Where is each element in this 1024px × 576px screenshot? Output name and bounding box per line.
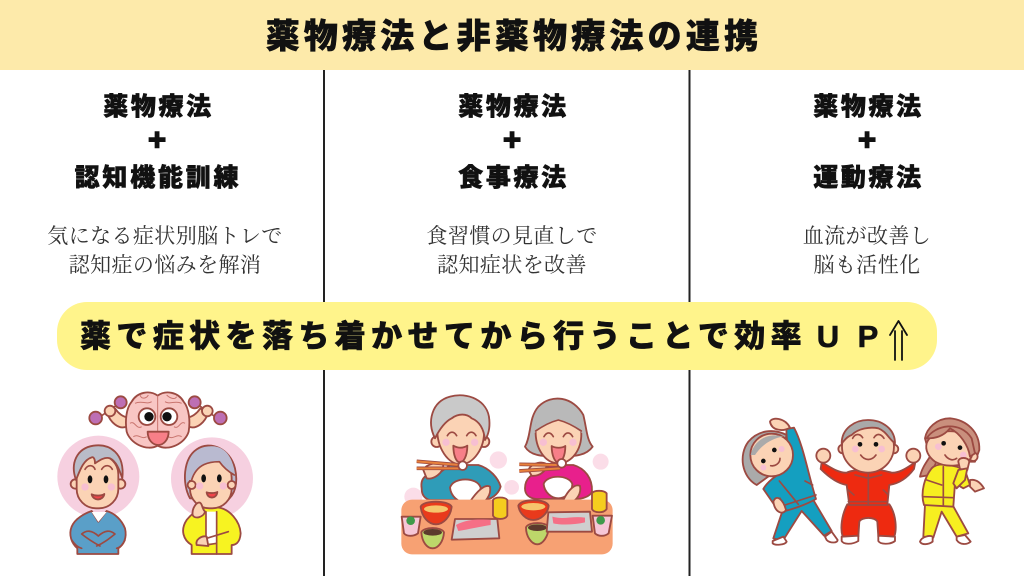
heading: cognitive training: 薬物療法 <box>103 93 214 121</box>
panel: diet text <box>426 93 598 277</box>
title: 薬物療法と非薬物療法の連携 <box>266 18 762 56</box>
icon: dishes <box>402 491 612 548</box>
icon: pink circles <box>57 436 253 519</box>
callout banner: P <box>858 319 878 354</box>
heading: exercise therapy <box>813 93 924 192</box>
heading: diet therapy <box>458 93 569 192</box>
description: diet therapy: 認知症状を改善 <box>437 253 587 277</box>
illustration: brain and seniors <box>57 392 253 554</box>
heading: cognitive training: 認知機能訓練 <box>75 163 241 192</box>
callout banner <box>57 302 937 370</box>
icon: senior man eating <box>417 395 501 506</box>
illustration: seniors eating <box>401 395 613 554</box>
heading: diet therapy: 食事療法 <box>458 164 569 192</box>
icon: senior woman eating <box>519 399 593 502</box>
icon: man in red tracksuit <box>816 420 920 544</box>
icon: woman in blue tracksuit <box>743 419 838 545</box>
description: diet therapy <box>426 224 598 277</box>
icon: senior woman <box>183 446 241 554</box>
header band <box>0 0 1024 70</box>
heading: exercise therapy: 運動療法 <box>813 164 924 192</box>
panel: exercise text <box>803 93 931 277</box>
heading: cognitive training <box>75 93 241 192</box>
description: exercise therapy: 血流が改善し <box>803 224 931 248</box>
heading: exercise therapy: 薬物療法 <box>813 93 924 121</box>
description: cognitive training: 気になる症状別脳トレで <box>47 224 283 248</box>
callout banner: U <box>817 319 839 354</box>
icon: woman in yellow tracksuit <box>920 418 984 544</box>
heading: diet therapy: 薬物療法 <box>458 93 569 121</box>
description: cognitive training: 認知症の悩みを解消 <box>69 253 261 277</box>
description: exercise therapy: 脳も活性化 <box>814 253 920 277</box>
heading: diet therapy: + <box>503 122 521 157</box>
callout banner: 薬で症状を落ち着かせてから行うことで効率 <box>80 319 807 354</box>
panel: cognitive training text <box>47 93 283 277</box>
heading: exercise therapy: + <box>858 122 876 157</box>
description: diet therapy: 食習慣の見直しで <box>426 224 598 248</box>
description: cognitive training <box>47 224 283 277</box>
icon: senior man <box>70 445 126 554</box>
heading: cognitive training: + <box>148 122 166 157</box>
illustration: seniors exercising <box>743 418 984 545</box>
icon: brain with dumbbells <box>89 392 227 448</box>
icon: steam clouds <box>404 451 609 506</box>
icon: dining table <box>401 500 613 554</box>
description: exercise therapy <box>803 224 931 277</box>
arrow: up <box>890 321 907 360</box>
